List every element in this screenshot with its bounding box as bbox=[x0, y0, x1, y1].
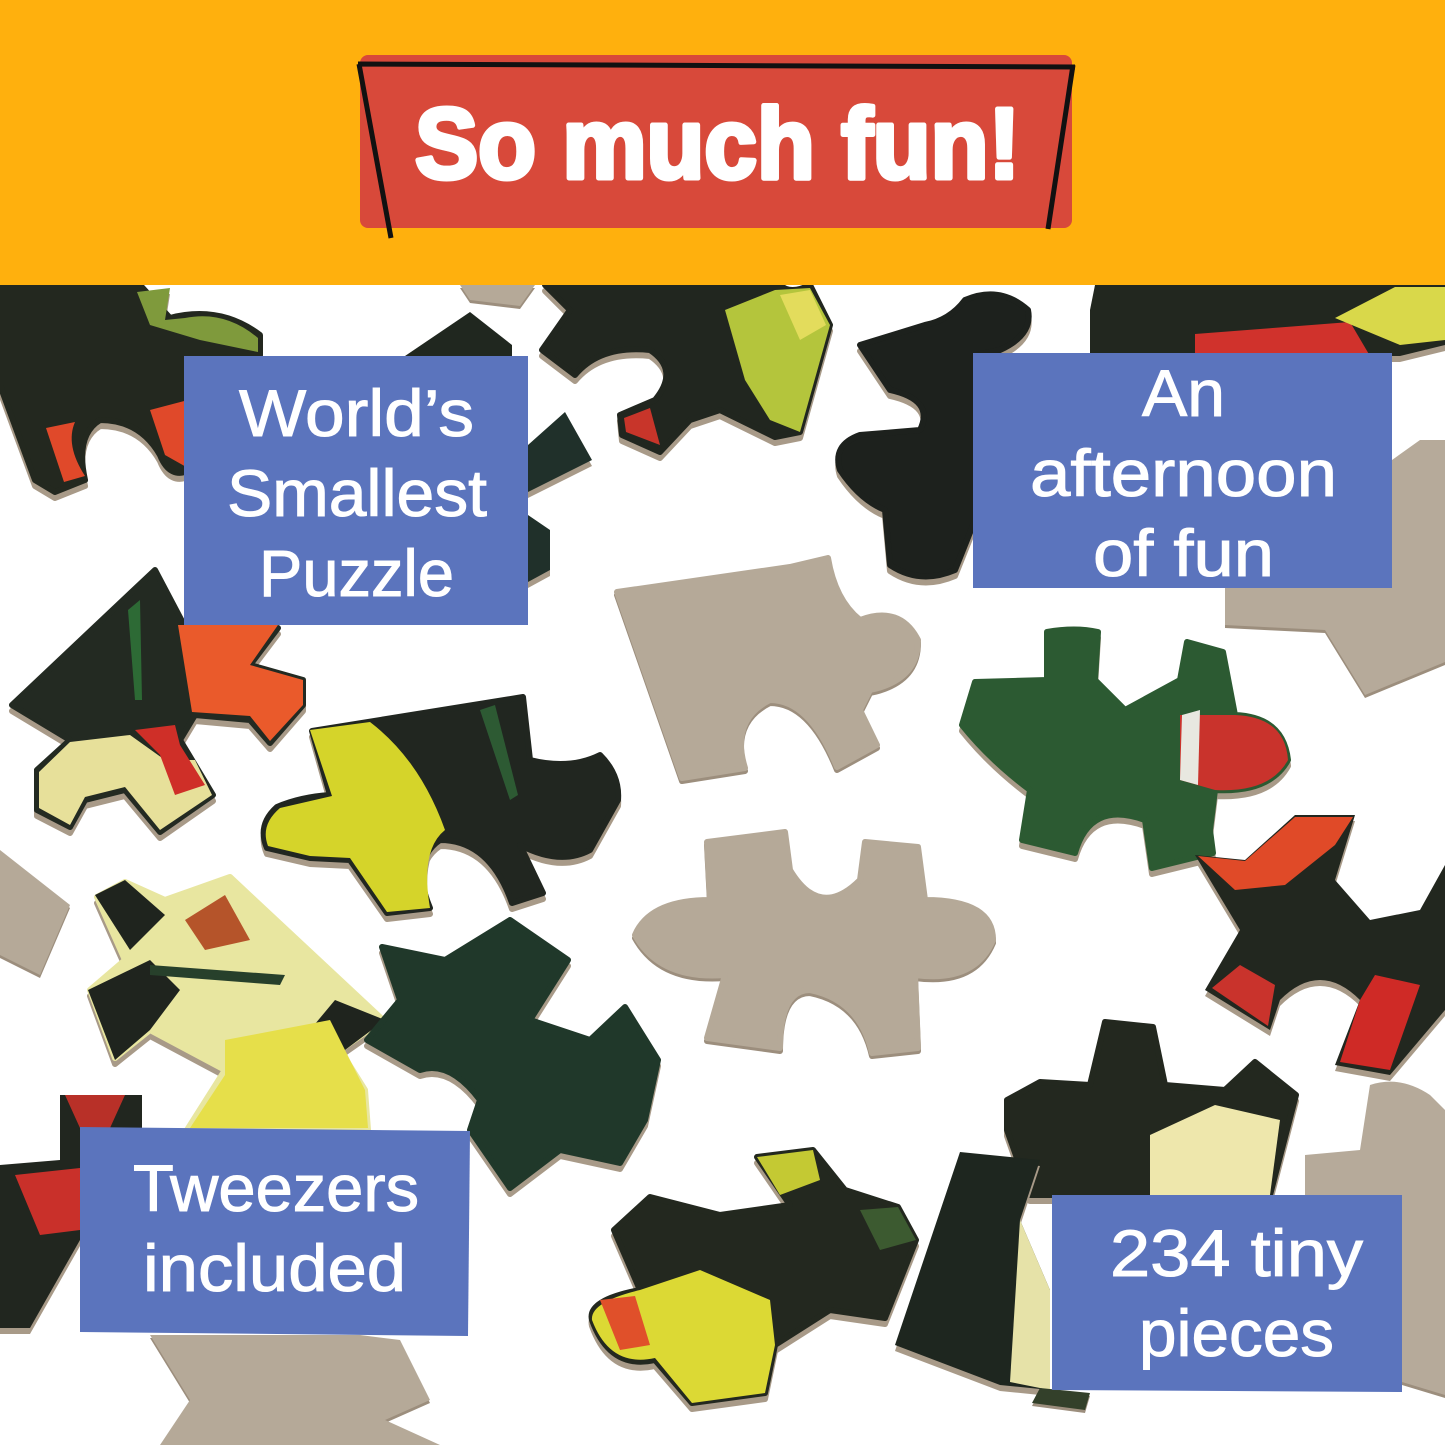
puzzle piece: small tan fragment top bbox=[460, 285, 535, 306]
puzzle piece: top center dark with lime bbox=[542, 285, 830, 452]
label: An afternoon of fun bbox=[973, 353, 1392, 590]
puzzle piece: yellow and white upper right bbox=[1007, 1022, 1296, 1195]
puzzle piece: bottom center yellow and dark bbox=[592, 1150, 916, 1403]
puzzle piece: top right dark, red and yellow bbox=[1090, 285, 1445, 356]
puzzle piece: right tan back side bbox=[1225, 440, 1445, 695]
label: World's Smallest Puzzle: World’s bbox=[239, 376, 474, 450]
puzzle piece: small fragment at bottom bbox=[1032, 1388, 1090, 1410]
puzzle piece: tan bottom bbox=[150, 1335, 440, 1445]
label: 234 tiny pieces bbox=[1052, 1195, 1402, 1392]
title banner: So much fun! bbox=[415, 88, 1020, 200]
label: World's Smallest Puzzle bbox=[184, 356, 528, 625]
label: 234 tiny pieces: 234 tiny bbox=[1110, 1216, 1363, 1290]
puzzle piece: left dark, orange and yellow bbox=[12, 570, 303, 832]
puzzle piece: bottom left red bbox=[0, 1095, 142, 1328]
puzzle piece: yellow flower bbox=[88, 877, 385, 1130]
label: Tweezers included bbox=[80, 1127, 470, 1336]
puzzle piece: green star bbox=[367, 920, 658, 1188]
puzzle piece: top left dark and red bbox=[0, 285, 260, 492]
title banner bbox=[358, 55, 1075, 238]
puzzle piece: right green with red tab bbox=[962, 630, 1288, 868]
label: An afternoon of fun: An bbox=[1142, 356, 1225, 430]
puzzle piece: right dark and red bbox=[1195, 815, 1445, 1075]
orange header band bbox=[0, 0, 1445, 285]
puzzle piece: center tan back side bbox=[617, 558, 918, 778]
puzzle piece: center tan cross bbox=[635, 832, 993, 1053]
puzzle piece fragments behind first label bbox=[405, 312, 592, 582]
label: An afternoon of fun: afternoon bbox=[1030, 436, 1337, 510]
label: World's Smallest Puzzle: Smallest bbox=[227, 456, 487, 530]
label: Tweezers included: Tweezers bbox=[133, 1151, 419, 1225]
puzzle piece: center left yellow and dark bbox=[264, 697, 618, 913]
label: Tweezers included: included bbox=[143, 1231, 406, 1305]
puzzle piece: right tan bottom bbox=[1305, 1082, 1445, 1395]
label: An afternoon of fun: of fun bbox=[1093, 516, 1274, 590]
label: 234 tiny pieces: pieces bbox=[1139, 1296, 1334, 1370]
puzzle piece: dark and white strip bbox=[895, 1152, 1050, 1390]
label: World's Smallest Puzzle: Puzzle bbox=[259, 536, 454, 610]
puzzle piece: tan left edge bbox=[0, 850, 70, 975]
puzzle piece: upper right black bbox=[838, 294, 1029, 576]
